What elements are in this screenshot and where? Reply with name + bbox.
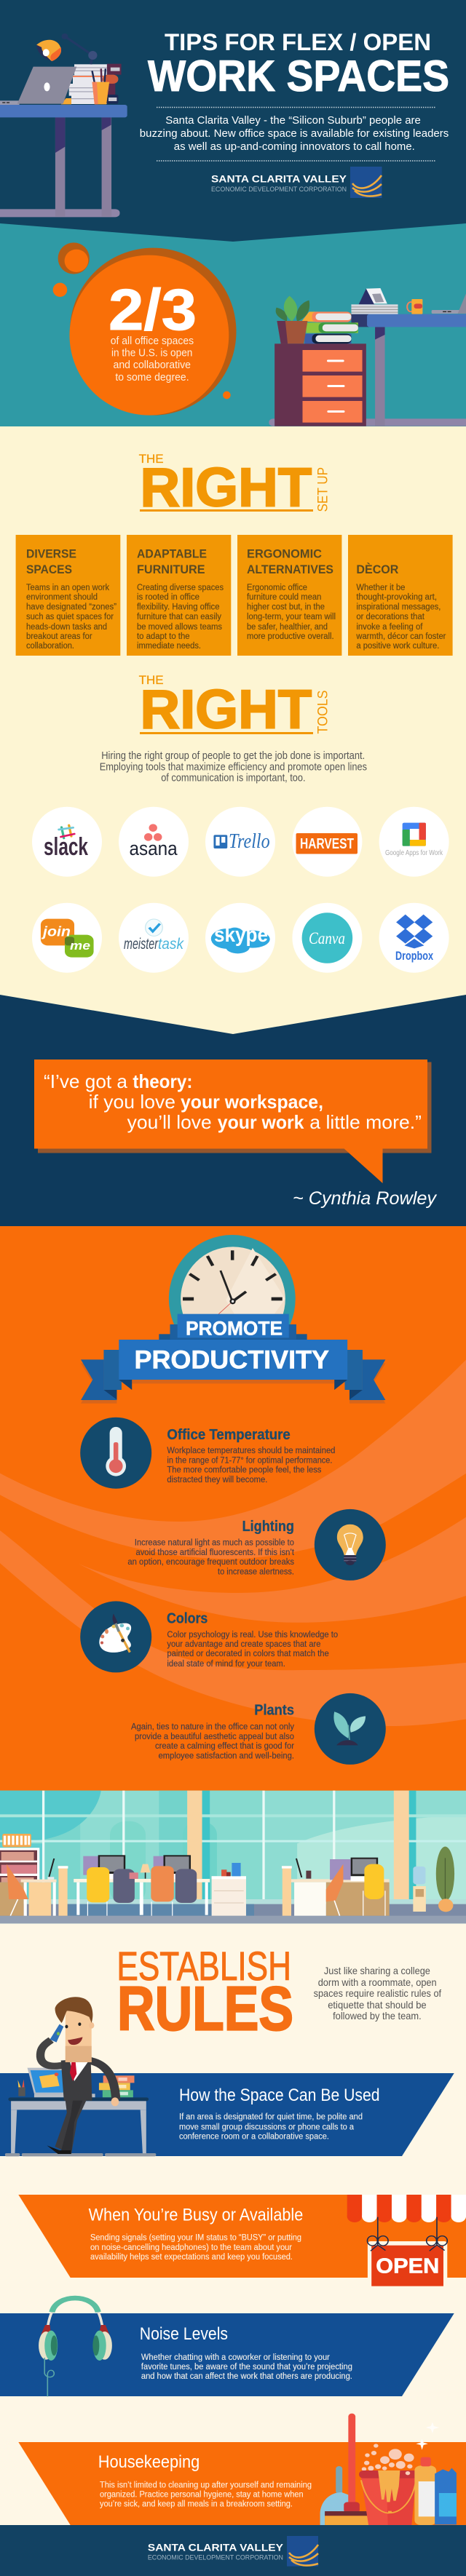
background: teal stat band <box>0 223 466 426</box>
panel: decor: invoke a feeling of <box>356 623 423 632</box>
logo: dropbox: Dropbox <box>395 949 433 963</box>
panel: decor: Whether it be <box>356 584 405 592</box>
heading: the right set up: RIGHT <box>140 457 312 518</box>
illustration: header desk with laptop, books and lamp <box>0 33 127 217</box>
panel: ergonomic alternatives: ALTERNATIVES <box>247 562 333 576</box>
title: WORK SPACES <box>148 52 449 100</box>
logo: trello: Trello <box>229 830 270 853</box>
panel: housekeeping: you’re sick, and keep all meals in a breakroom setting. <box>100 2499 293 2509</box>
panel: noise levels: Noise Levels <box>140 2324 228 2344</box>
heading: establish rules <box>116 1943 293 2043</box>
logo: header <box>211 167 382 198</box>
intro text block: as well as up-and-coming innovators to call home. <box>174 140 415 153</box>
panel: decor: warmth, décor can foster <box>355 632 446 641</box>
item: colors <box>80 1601 338 1672</box>
heading: the right set up: SET UP <box>316 467 331 512</box>
callout: quote: your workspace, <box>181 1091 323 1113</box>
item: lighting <box>127 1509 386 1581</box>
item: plants: Again, ties to nature in the office can not only <box>131 1721 295 1731</box>
panel: when you're busy or available <box>18 2195 466 2278</box>
panel: ergonomic alternatives <box>237 535 341 656</box>
item: lighting: Increase natural light as much as possible to <box>135 1538 294 1548</box>
panel: housekeeping: organized. Practice personal hygiene, stay at home when <box>100 2489 304 2500</box>
panel: how the space can be used <box>0 2073 454 2156</box>
background: orange swooshes <box>0 1360 466 1726</box>
ribbon banner: promote productivity: PRODUCTIVITY <box>134 1346 329 1375</box>
logo: trello <box>205 807 275 877</box>
logo: footer <box>148 2536 318 2567</box>
panel: adaptable furniture: to adapt to the <box>137 632 190 641</box>
icon: open sign with awning <box>347 2195 466 2290</box>
logo: meistertask: meister <box>124 936 159 953</box>
item: office temperature: in the range of 71-77° for optimal performance. <box>167 1455 332 1466</box>
logo: header: ECONOMIC DEVELOPMENT CORPORATION <box>211 186 347 194</box>
logo: meistertask <box>119 903 189 973</box>
logo: dropbox <box>379 903 449 973</box>
logo: harvest <box>292 807 362 877</box>
item: lighting: to increase alertness. <box>218 1567 294 1577</box>
logo: slack: slack <box>44 833 88 861</box>
logo: join.me: join <box>41 925 71 940</box>
panel: diverse spaces: heads-down tasks and <box>26 623 107 632</box>
panel: housekeeping: This isn’t limited to cleaning up after yourself and remaining <box>100 2479 312 2489</box>
panel: noise levels: and how that can affect the work that others are producing. <box>141 2371 352 2381</box>
illustration: open office scene <box>0 1791 466 1923</box>
illustration: businessman on phone at desk <box>5 1997 156 2156</box>
panel: decor: thought-provoking art, <box>356 593 437 602</box>
panel: adaptable furniture: immediate needs. <box>137 642 201 651</box>
panel: adaptable furniture: is rooted in office <box>137 593 200 602</box>
stat bubble: 2/3: of all office spaces <box>111 335 194 347</box>
item: office temperature: distracted they will become. <box>167 1474 267 1484</box>
panel: how the space can be used: conference room or a collaborative space. <box>179 2131 329 2141</box>
heading: establish rules: ESTABLISH <box>116 1943 291 1989</box>
panel: diverse spaces: have designated “zones” <box>26 603 116 612</box>
panel: adaptable furniture: be moved allows teams <box>137 623 222 632</box>
heading: the right tools: TOOLS <box>316 690 331 734</box>
panel: how the space can be used: move small group discussions or phone calls to a <box>179 2122 354 2132</box>
panel: housekeeping: Housekeeping <box>98 2452 200 2472</box>
icon: open sign with awning: OPEN <box>376 2254 439 2278</box>
logo: canva: Canva <box>309 929 345 947</box>
panel: diverse spaces: such as quiet spaces for <box>26 613 114 621</box>
item: lighting: avoid those artificial fluorescents. If this isn’t <box>135 1547 295 1557</box>
illustration: desk with cabinet, plant, books and phone <box>269 288 466 426</box>
logo: skype: skype <box>214 923 268 947</box>
item: colors: ideal state of mind for your team. <box>167 1658 285 1669</box>
background: navy quote band <box>0 995 466 1226</box>
icon: headphones <box>39 2298 112 2396</box>
rules intro text: followed by the team. <box>333 2010 422 2022</box>
footer <box>0 2525 466 2576</box>
panel: ergonomic alternatives: furniture could mean <box>247 593 321 602</box>
icon: light bulb <box>337 1524 363 1565</box>
item: office temperature: Workplace temperatures should be maintained <box>167 1445 336 1455</box>
panel: how the space can be used: If an area is designated for quiet time, be polite and <box>179 2112 363 2122</box>
item: colors: painted or decorated in colors that match the <box>167 1648 329 1658</box>
callout: quote: if you love <box>89 1091 175 1113</box>
rules intro text <box>314 1965 441 2022</box>
illustration: cleaning supplies <box>320 2414 457 2525</box>
heading: establish rules: RULES <box>117 1975 293 2043</box>
item: colors: your advantage and create spaces that are <box>167 1639 321 1649</box>
panel: how the space can be used: How the Space Can Be Used <box>179 2086 380 2105</box>
callout: quote: theory: <box>133 1070 192 1092</box>
icon: paint palette <box>99 1614 131 1653</box>
panel: decor <box>348 535 453 656</box>
panel: adaptable furniture: ADAPTABLE <box>137 547 207 561</box>
logo: slack <box>32 807 102 877</box>
logo: join.me: me <box>70 939 90 953</box>
panel: ergonomic alternatives: higher cost but, in the <box>247 603 325 612</box>
background: cream tools band <box>0 426 466 1035</box>
logo: join.me <box>32 903 102 973</box>
panel: housekeeping <box>18 2442 466 2525</box>
item: plants: employee satisfaction and well-being. <box>159 1750 294 1760</box>
panel: diverse spaces: Teams in an open work <box>26 584 109 592</box>
stat bubble: 2/3: in the U.S. is open <box>111 348 192 359</box>
panel: diverse spaces: SPACES <box>26 562 72 576</box>
logo: asana <box>119 807 189 877</box>
tools intro text: of communication is important, too. <box>161 773 306 784</box>
rules intro text: Just like sharing a college <box>324 1965 430 1976</box>
panel: diverse spaces: collaboration. <box>26 642 74 651</box>
logo: asana: asana <box>130 838 178 859</box>
logo: google apps for work <box>379 807 449 877</box>
panel: ergonomic alternatives: ERGONOMIC <box>247 547 322 561</box>
item: plants <box>131 1693 386 1765</box>
icon: thermometer <box>106 1427 126 1476</box>
logo: skype <box>205 903 275 973</box>
panel: adaptable furniture: FURNITURE <box>137 562 205 576</box>
panel: noise levels <box>0 2313 454 2396</box>
logo: google apps for work: Google Apps for Work <box>385 849 443 857</box>
logo: canva <box>292 903 362 973</box>
panel: adaptable furniture: furniture that can easily <box>137 613 221 621</box>
panel: when you're busy or available: availability helps set expectations and keep you focused. <box>90 2251 293 2262</box>
callout: quote: your work <box>218 1111 304 1133</box>
title: TIPS FOR FLEX / OPEN <box>165 29 431 55</box>
stat bubble: 2/3: and collaborative <box>114 359 191 371</box>
logo: footer: SANTA CLARITA VALLEY <box>148 2542 284 2553</box>
panel: decor: DÈCOR <box>356 562 398 576</box>
panel: decor: or decorations that <box>356 613 425 621</box>
logo: meistertask: task <box>158 936 184 953</box>
item: plants: provide a beautiful aesthetic appeal but also <box>135 1731 294 1741</box>
icon: seedling <box>333 1712 366 1745</box>
stat bubble: 2/3 <box>53 242 236 416</box>
panel: adaptable furniture: Creating diverse spaces <box>137 584 224 592</box>
panel: decor: a positive work culture. <box>356 642 439 651</box>
panel: noise levels: favorite tunes, be aware of the sound that you’re projecting <box>141 2361 352 2372</box>
panel: adaptable furniture: flexibility. Having office <box>137 603 220 612</box>
panel: diverse spaces <box>16 535 120 656</box>
stat bubble: 2/3: 2/3 <box>108 277 197 342</box>
item: plants: create a calming effect that is good for <box>155 1741 294 1751</box>
panel: diverse spaces: breakout areas for <box>26 632 92 641</box>
rules intro text: spaces require realistic rules of <box>314 1987 441 1999</box>
callout: quote <box>34 1060 431 1183</box>
panel: noise levels: Whether chatting with a coworker or listening to your <box>141 2352 330 2362</box>
quote attribution: ~ Cynthia Rowley <box>293 1188 438 1209</box>
ribbon banner: promote productivity: PROMOTE <box>186 1317 283 1339</box>
logo: header: SANTA CLARITA VALLEY <box>211 173 347 185</box>
item: office temperature: Office Temperature <box>167 1427 291 1443</box>
callout: quote: you’ll love <box>127 1111 212 1133</box>
intro text block <box>140 108 449 161</box>
panel: ergonomic alternatives: Ergonomic office <box>247 584 307 592</box>
callout: quote: “I’ve got a <box>44 1070 128 1092</box>
panel: when you're busy or available: When You’re Busy or Available <box>89 2206 303 2225</box>
background: orange productivity band <box>0 1226 466 1791</box>
panel: decor: inspirational messages, <box>356 603 441 612</box>
callout: quote: a little more.” <box>309 1111 422 1133</box>
item: colors: Colors <box>167 1611 208 1627</box>
item: office temperature <box>80 1418 336 1489</box>
panel: diverse spaces: environment should <box>26 593 98 602</box>
rules intro text: dorm with a roommate, open <box>318 1976 437 1988</box>
stat bubble: 2/3: to some degree. <box>115 372 189 383</box>
panel: ergonomic alternatives: more productive overall. <box>247 632 334 641</box>
background: header navy <box>0 0 466 244</box>
intro text block: buzzing about. New office space is available for existing leaders <box>140 127 449 140</box>
panel: ergonomic alternatives: be safer, healthier, and <box>247 623 328 632</box>
logo: footer: ECONOMIC DEVELOPMENT CORPORATION <box>148 2553 283 2561</box>
item: office temperature: The more comfortable people feel, the less <box>167 1465 321 1475</box>
heading: the right tools: RIGHT <box>140 678 312 739</box>
heading: the right tools: THE <box>139 673 164 687</box>
panel: diverse spaces: DIVERSE <box>26 547 76 561</box>
tools intro text: Hiring the right group of people to get the job done is important. <box>101 750 365 762</box>
item: plants: Plants <box>254 1703 294 1719</box>
rules intro text: etiquette that should be <box>328 1999 427 2011</box>
panel: when you're busy or available: on noise-cancelling headphones) to the team about your <box>90 2242 292 2252</box>
panel: adaptable furniture <box>127 535 231 656</box>
item: lighting: Lighting <box>242 1519 294 1535</box>
item: lighting: an option, encourage frequent outdoor breaks <box>127 1557 294 1567</box>
panel: ergonomic alternatives: long-term, your team will <box>247 613 336 621</box>
intro text block: Santa Clarita Valley - the “Silicon Suburb” people are <box>165 114 421 127</box>
icon: clock <box>169 1235 296 1363</box>
tools intro text <box>100 750 367 784</box>
title <box>148 29 449 100</box>
tools intro text: Employing tools that maximize efficiency and promote open lines <box>100 761 367 773</box>
logo: harvest: HARVEST <box>300 836 354 852</box>
heading: the right set up: THE <box>139 452 164 466</box>
panel: when you're busy or available: Sending signals (setting your IM status to “BUSY” or putting <box>90 2232 301 2242</box>
ribbon banner: promote productivity <box>81 1314 385 1404</box>
item: colors: Color psychology is real. Use this knowledge to <box>167 1629 338 1639</box>
